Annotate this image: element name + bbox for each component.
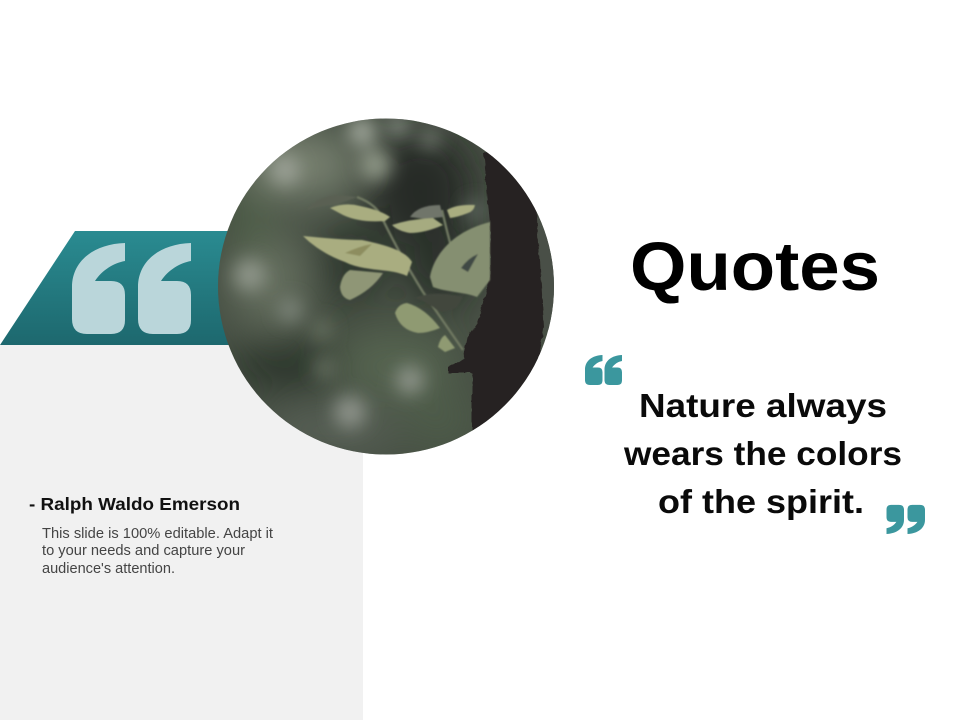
panel: grey author panel: [0, 345, 363, 720]
quote text: of the spirit.: [658, 483, 864, 520]
quote text: Nature always: [639, 387, 887, 424]
photo: plant on tree trunk in a circle: [210, 110, 560, 460]
description text: [42, 526, 273, 577]
tree trunk: [448, 150, 560, 440]
description text: This slide is 100% editable. Adapt it: [42, 526, 273, 542]
banner: teal parallelogram: [0, 231, 240, 345]
plant leaves and stems: [303, 195, 490, 352]
icon: large opening quotation mark: [72, 243, 191, 334]
description text: to your needs and capture your: [42, 543, 245, 559]
quote text: wears the colors: [623, 435, 902, 472]
icon: small opening quote: [585, 355, 622, 385]
icon: small closing quote: [887, 505, 925, 534]
quote text: [623, 387, 902, 520]
author name: - Ralph Waldo Emerson: [29, 494, 240, 514]
title: Quotes: [630, 228, 880, 305]
description text: audience's attention.: [42, 561, 175, 577]
